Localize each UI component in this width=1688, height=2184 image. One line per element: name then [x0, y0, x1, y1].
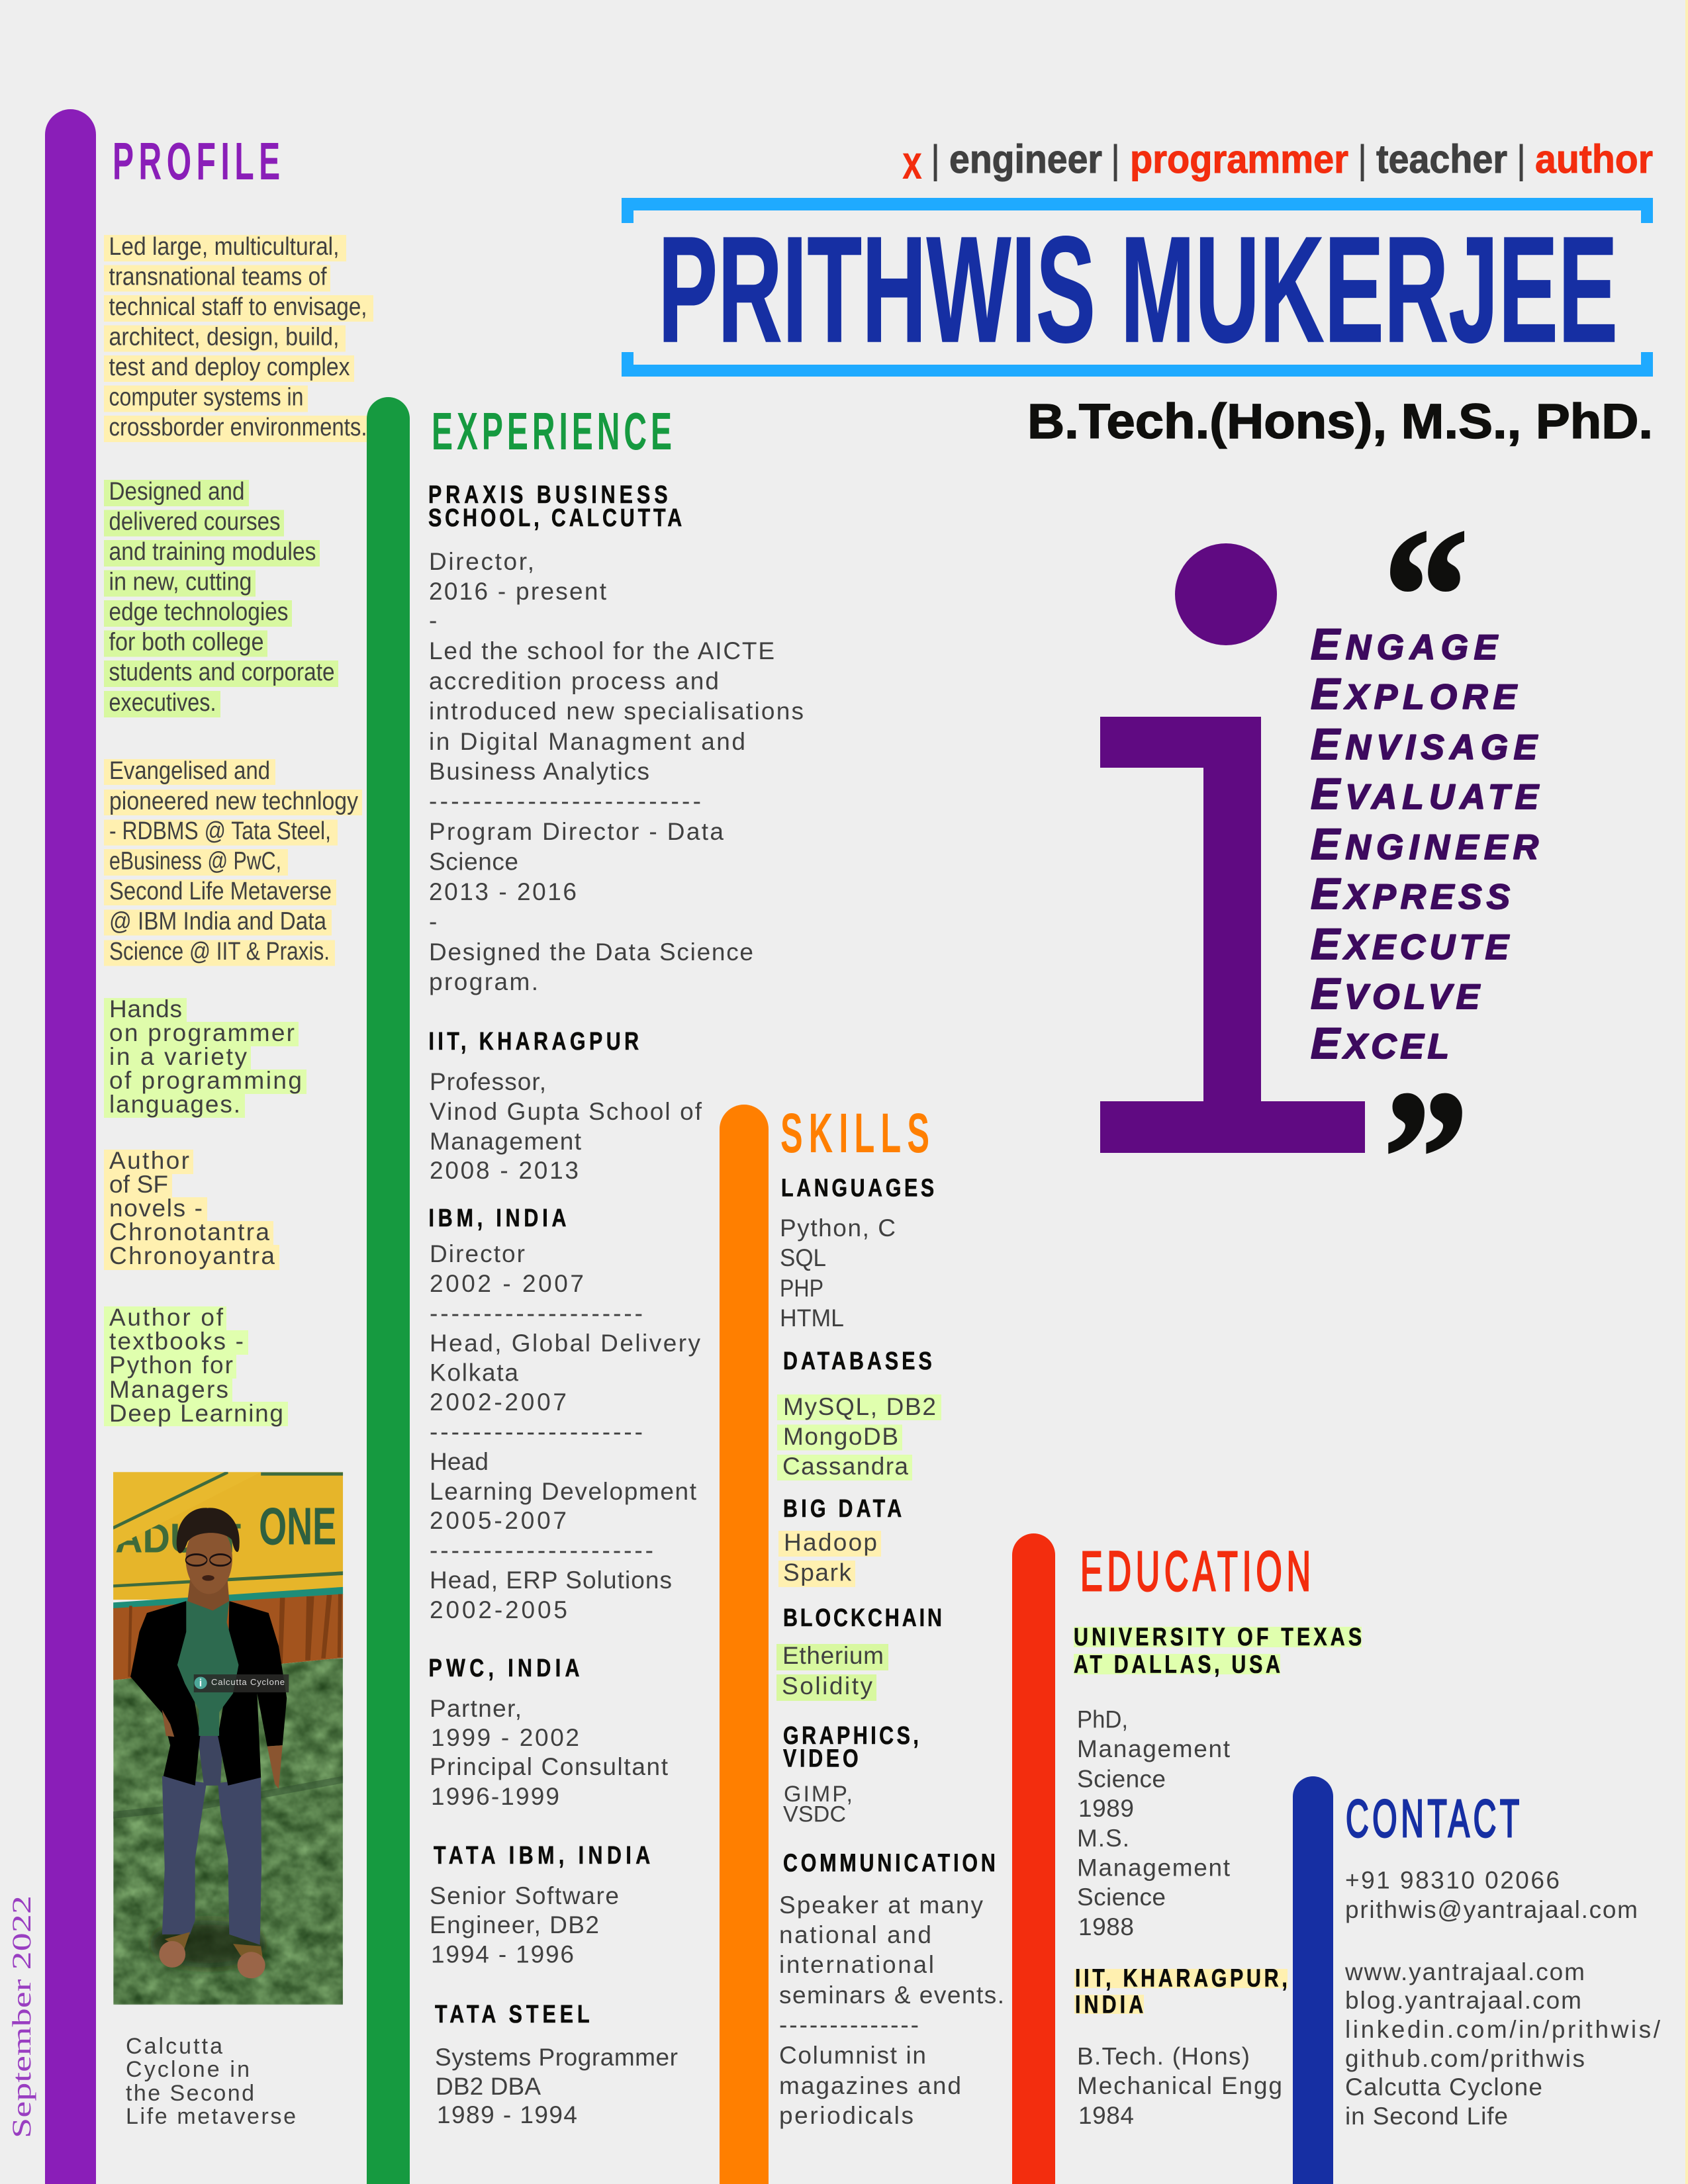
entry: university of texas: 1988 [1078, 1913, 1134, 1940]
text block: textbooks: Python for [109, 1351, 233, 1379]
entry: praxis: program. [429, 968, 538, 995]
entry: ibm india [429, 1205, 700, 1623]
text block: novels: novels - [109, 1195, 203, 1222]
skill group: blockchain [776, 1604, 942, 1701]
skill group: blockchain: Etherium [782, 1642, 884, 1669]
tagline: | [1110, 137, 1121, 181]
opening quote: “ [1383, 488, 1469, 702]
purple timeline bar [45, 109, 96, 2184]
entry: university of texas: Management [1077, 1735, 1231, 1762]
entry: pwc india [429, 1655, 669, 1810]
entry: ibm india: IBM, INDIA [429, 1205, 567, 1232]
closing quote: ” [1383, 1050, 1469, 1264]
degrees: B.Tech.(Hons), M.S., PhD. [1027, 394, 1653, 449]
skill group: communication: seminars & events. [779, 1981, 1004, 2009]
caption: avatar: the Second [126, 2081, 254, 2106]
panel: profile [7, 109, 373, 2184]
skill group: languages: HTML [780, 1304, 844, 1332]
entry: iit kharagpur india: INDIA [1075, 1991, 1143, 2019]
tagline: | [1516, 137, 1526, 181]
entry: ibm india: -------------------- [430, 1300, 643, 1327]
entry: praxis: Business Analytics [429, 758, 649, 785]
entry: university of texas: UNIVERSITY OF TEXAS [1074, 1623, 1362, 1651]
skill group: communication: COMMUNICATION [783, 1849, 996, 1877]
header [622, 136, 1653, 449]
entry: tata steel: Systems Programmer [435, 2044, 678, 2071]
text block: evangelism: Science @ IIT & Praxis. [109, 938, 330, 966]
entry: praxis: PRAXIS BUSINESS [428, 481, 668, 509]
entry: praxis: ------------------------- [429, 788, 701, 815]
text block: textbooks: Managers [109, 1376, 228, 1403]
text block: leadership: architect, design, build, [109, 323, 339, 351]
entry: ibm india: Head [430, 1448, 489, 1475]
text block: evangelism: Evangelised and [109, 757, 270, 785]
entry: ibm india: Kolkata [430, 1359, 518, 1386]
heading: profile: PROFILE [113, 131, 280, 191]
entry: university of texas [1074, 1623, 1362, 1940]
text block: evangelism: @ IBM India and Data [109, 908, 327, 936]
entry: praxis: Designed the Data Science [429, 938, 753, 966]
skill group: blockchain: Solidity [782, 1672, 872, 1700]
entry: praxis: - [429, 908, 437, 935]
text block: teaching: delivered courses [109, 508, 281, 536]
panel: experience [367, 397, 804, 2184]
entry: ibm india: 2002 - 2007 [430, 1270, 584, 1297]
skill group: big data: Spark [783, 1559, 851, 1586]
skill group: databases: DATABASES [783, 1347, 932, 1375]
skill group: databases: Cassandra [782, 1453, 908, 1480]
contact links: in Second Life [1345, 2103, 1508, 2130]
word list: EXPLORE [1311, 669, 1518, 718]
text block: textbooks: textbooks - [109, 1328, 244, 1355]
caption: avatar: Cyclone in [126, 2057, 250, 2082]
entry: university of texas: Science [1077, 1884, 1166, 1911]
entry: pwc india: Partner, [430, 1695, 522, 1722]
entry: praxis: Science [429, 848, 518, 875]
contact links: linkedin.com/in/prithwis/ [1345, 2016, 1661, 2043]
icon: large letter i [1100, 543, 1365, 1153]
entry: ibm india: 2005-2007 [430, 1507, 567, 1534]
entry: iit kharagpur: Professor, [430, 1068, 546, 1095]
panel: skills [720, 1102, 1004, 2184]
word list: ENGAGE [1311, 619, 1499, 668]
skill group: communication: international [779, 1951, 934, 1978]
contact links: www.yantrajaal.com [1344, 1958, 1585, 1985]
contact details [1345, 1866, 1638, 1923]
avatar image: ADULT [115, 1516, 241, 1562]
skill group: languages: PHP [780, 1275, 823, 1302]
skill group: languages: LANGUAGES [781, 1174, 934, 1202]
skill group: graphics [783, 1722, 919, 1827]
entry: ibm india: --------------------- [430, 1537, 653, 1564]
tagline: author [1535, 137, 1653, 181]
text block: evangelism: pioneered new technlogy [109, 788, 358, 815]
panel: i motto [1100, 488, 1540, 1264]
text block: textbooks: Deep Learning [109, 1400, 283, 1427]
skill group: graphics: VIDEO [783, 1745, 859, 1772]
entry: tata ibm [430, 1842, 650, 1968]
tagline [902, 136, 1653, 189]
text block: programmer: on programmer [109, 1019, 295, 1046]
text block: leadership: Led large, multicultural, [109, 233, 339, 261]
entry: university of texas: AT DALLAS, USA [1074, 1651, 1280, 1678]
entry: university of texas: 1989 [1078, 1795, 1134, 1822]
skill group: big data: Hadoop [784, 1529, 877, 1556]
text block: teaching: edge technologies [109, 598, 289, 626]
avatar image: Calcutta Cyclone [211, 1677, 285, 1687]
text block: teaching: executives. [109, 689, 216, 717]
entry: praxis: introduced new specialisations [429, 698, 804, 725]
entry: iit kharagpur india: Mechanical Engg [1077, 2072, 1282, 2099]
entry: pwc india: 1996-1999 [431, 1783, 559, 1810]
avatar image: i [199, 1678, 202, 1689]
word list [1311, 619, 1540, 1068]
text block: textbooks [104, 1304, 288, 1427]
text block: leadership [104, 233, 373, 442]
text block: leadership: test and deploy complex [109, 353, 350, 381]
heading: education: EDUCATION [1080, 1540, 1311, 1602]
entry: praxis: 2013 - 2016 [429, 878, 577, 905]
red timeline bar [1012, 1533, 1055, 2184]
text block: teaching: and training modules [109, 538, 316, 566]
text block: teaching: Designed and [109, 478, 245, 506]
text block: programmer [104, 995, 306, 1118]
tagline: x [902, 136, 922, 189]
skill group: blockchain: BLOCKCHAIN [783, 1604, 942, 1632]
text block: novels: Chronoyantra [109, 1242, 275, 1269]
contact links: github.com/prithwis [1345, 2045, 1585, 2072]
word list: EXPRESS [1311, 869, 1510, 918]
entry: iit kharagpur: 2008 - 2013 [430, 1157, 579, 1184]
text block: novels: Chronotantra [109, 1218, 269, 1246]
entry: ibm india: Head, Global Delivery [430, 1330, 700, 1357]
skill group: databases: MySQL, DB2 [783, 1393, 936, 1420]
entry: praxis: - [429, 607, 437, 634]
word list: EXECUTE [1311, 919, 1510, 968]
entry: university of texas: Science [1077, 1766, 1166, 1792]
text block: evangelism [104, 757, 362, 966]
text block: evangelism: eBusiness @ PwC, [109, 847, 281, 875]
orange timeline bar [720, 1105, 769, 2184]
entry: iit kharagpur: IIT, KHARAGPUR [429, 1028, 639, 1056]
entry: praxis: Director, [429, 548, 534, 575]
text block: novels: of SF [109, 1171, 168, 1198]
heading: contact: CONTACT [1346, 1788, 1519, 1848]
entry: praxis: Led the school for the AICTE [429, 637, 774, 664]
panel: education [1012, 1533, 1362, 2184]
contact links [1344, 1958, 1661, 2130]
word list: EVALUATE [1311, 769, 1540, 818]
text block: textbooks: Author of [109, 1304, 224, 1331]
tagline: teacher [1376, 137, 1507, 181]
entry: iit kharagpur india [1074, 1964, 1288, 2129]
contact details: +91 98310 02066 [1345, 1866, 1560, 1894]
entry: tata ibm: 1994 - 1996 [431, 1940, 574, 1968]
skill group: communication [779, 1849, 1004, 2129]
entry: tata steel [435, 2001, 678, 2128]
entry: tata steel: TATA STEEL [435, 2001, 590, 2028]
entry: tata steel: DB2 DBA [436, 2073, 541, 2100]
entry: iit kharagpur: Management [430, 1128, 582, 1155]
text block: programmer: languages. [109, 1091, 240, 1118]
entry: ibm india: 2002-2005 [430, 1596, 567, 1623]
text block: teaching [104, 478, 338, 717]
entry: praxis: 2016 - present [429, 578, 607, 605]
skill group: big data [778, 1495, 902, 1587]
entry: pwc india: Principal Consultant [430, 1753, 669, 1780]
avatar image: ONE [259, 1497, 336, 1556]
entry: university of texas: PhD, [1077, 1706, 1128, 1733]
entry: tata ibm: TATA IBM, INDIA [434, 1842, 650, 1870]
contact details: prithwis@yantrajaal.com [1345, 1896, 1638, 1923]
entry: praxis: SCHOOL, CALCUTTA [428, 504, 682, 532]
entry: iit kharagpur: Vinod Gupta School of [430, 1098, 702, 1125]
green timeline bar [367, 397, 410, 2184]
skill group: communication: Speaker at many [779, 1891, 984, 1919]
text block: leadership: computer systems in [109, 384, 303, 412]
entry: ibm india: -------------------- [430, 1418, 643, 1445]
skill group: graphics: VSDC [783, 1801, 846, 1827]
avatar image [113, 1472, 343, 2005]
contact links: blog.yantrajaal.com [1345, 1987, 1581, 2014]
skill group: languages [780, 1174, 934, 1332]
entry: iit kharagpur india: B.Tech. (Hons) [1077, 2042, 1250, 2070]
entry: ibm india: Head, ERP Solutions [430, 1567, 672, 1594]
text block: leadership: technical staff to envisage, [109, 293, 367, 321]
entry: ibm india: 2002-2007 [430, 1388, 567, 1416]
text block: novels: Author [109, 1147, 189, 1174]
entry: iit kharagpur india: IIT, KHARAGPUR, [1075, 1964, 1288, 1992]
blue timeline bar [1293, 1776, 1333, 2184]
skill group: communication: -------------- [779, 2011, 919, 2038]
name bracket frame [622, 198, 1653, 377]
text block: programmer: of programming [109, 1067, 302, 1094]
entry: tata steel: 1989 - 1994 [437, 2101, 577, 2128]
word list: ENGINEER [1311, 819, 1538, 868]
entry: pwc india: PWC, INDIA [429, 1655, 579, 1682]
entry: praxis: Program Director - Data [429, 818, 724, 845]
text block: leadership: crossborder environments. [109, 414, 367, 441]
skill group: communication: national and [779, 1921, 931, 1948]
text block: leadership: transnational teams of [109, 263, 327, 291]
text block: novels [104, 1147, 279, 1270]
skill group: languages: SQL [780, 1244, 826, 1271]
skill group: big data: BIG DATA [783, 1495, 902, 1523]
heading: experience: EXPERIENCE [432, 401, 672, 461]
entry: praxis [428, 481, 804, 995]
text block: teaching: in new, cutting [109, 568, 252, 596]
skill group: languages: Python, C [780, 1214, 896, 1242]
text block: teaching: for both college [109, 629, 263, 657]
entry: ibm india: Director [430, 1240, 525, 1267]
text block: evangelism: - RDBMS @ Tata Steel, [109, 817, 331, 845]
tagline: engineer [949, 137, 1102, 181]
caption: avatar: Life metaverse [126, 2104, 296, 2129]
skill group: communication: periodicals [779, 2102, 914, 2129]
entry: iit kharagpur [429, 1028, 702, 1184]
skill group: communication: magazines and [779, 2072, 961, 2099]
tagline: programmer [1130, 137, 1348, 181]
entry: tata ibm: Senior Software [430, 1882, 619, 1909]
entry: university of texas: Management [1077, 1854, 1231, 1881]
caption: avatar [126, 2034, 296, 2129]
text block: programmer: in a variety [109, 1043, 248, 1070]
panel: contact [1293, 1776, 1661, 2184]
skill group: graphics: GIMP, [784, 1782, 853, 1807]
text block: teaching: students and corporate [109, 659, 335, 686]
heading: skills: SKILLS [780, 1102, 929, 1164]
tagline: | [930, 137, 941, 181]
text block: evangelism: Second Life Metaverse [109, 878, 332, 905]
entry: praxis: in Digital Managment and [429, 728, 745, 755]
entry: university of texas: M.S. [1077, 1825, 1129, 1852]
entry: ibm india: Learning Development [430, 1478, 697, 1505]
entry: pwc india: 1999 - 2002 [431, 1724, 579, 1751]
contact links: Calcutta Cyclone [1345, 2073, 1542, 2101]
word list: EVOLVE [1311, 969, 1481, 1018]
tagline: | [1357, 137, 1368, 181]
skill group: databases [777, 1347, 941, 1480]
entry: iit kharagpur india: 1984 [1078, 2102, 1134, 2129]
entry: praxis: accredition process and [429, 667, 719, 695]
date label: September 2022 [7, 1895, 36, 2138]
skill group: communication: Columnist in [779, 2042, 926, 2069]
caption: avatar: Calcutta [126, 2034, 222, 2059]
skill group: databases: MongoDB [783, 1423, 898, 1450]
word list: ENVISAGE [1311, 719, 1538, 768]
text block: programmer: Hands [109, 995, 182, 1023]
word list: EXCEL [1311, 1019, 1449, 1068]
entry: tata ibm: Engineer, DB2 [430, 1911, 599, 1938]
skill group: graphics: GRAPHICS, [783, 1722, 919, 1750]
